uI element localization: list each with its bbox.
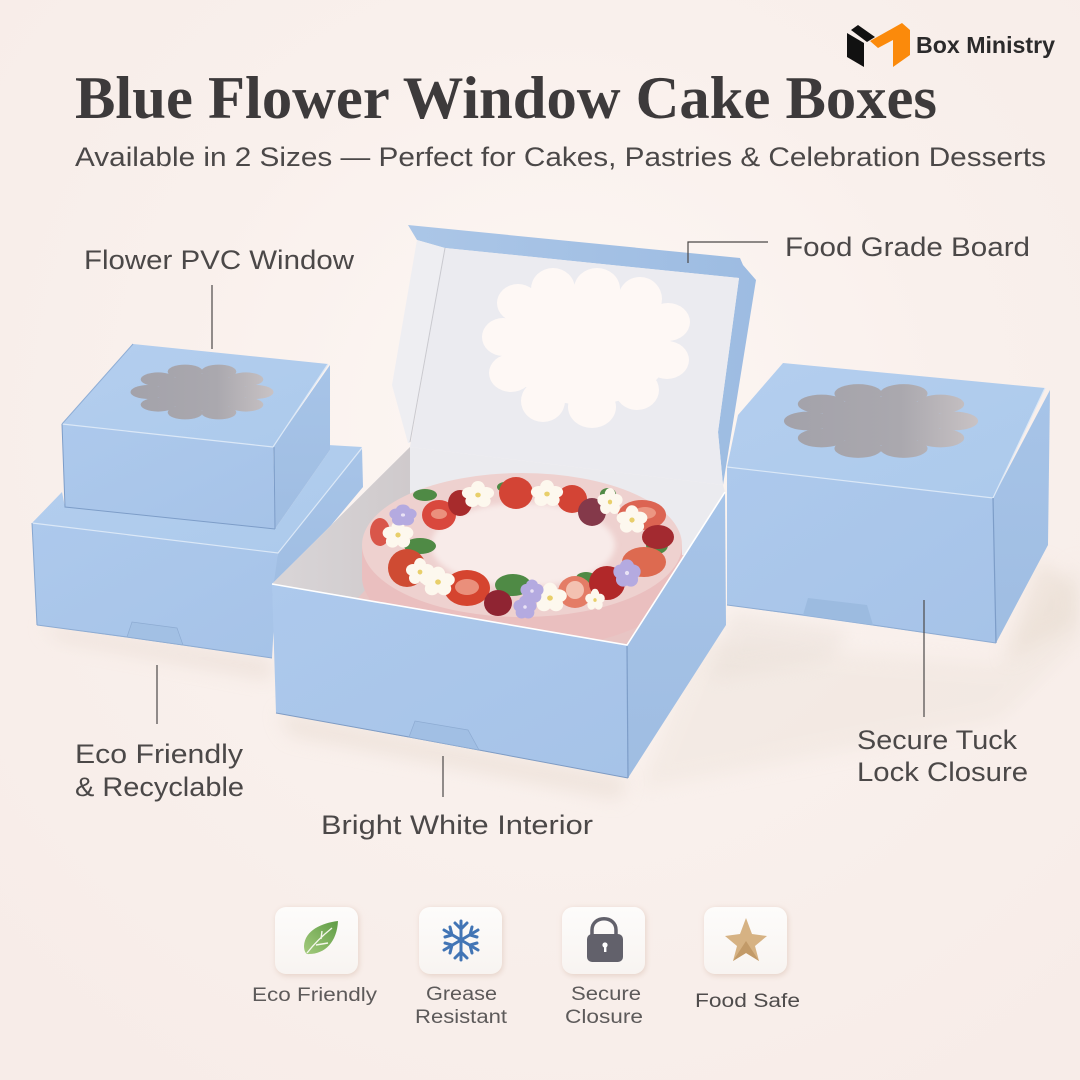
callout: Flower PVC Window: Flower PVC Window <box>84 245 355 275</box>
floor shadows <box>40 560 1080 800</box>
icon: snowflake <box>444 921 478 960</box>
feature: Secure Closure: Closure <box>565 1007 643 1028</box>
subtitle: Available in 2 Sizes — Perfect for Cakes, Pastries & Celebration Desserts <box>75 142 1046 172</box>
callout: Secure Tuck Lock Closure <box>857 600 1028 787</box>
callout: Eco Friendly & Recyclable <box>75 665 244 802</box>
callout: Secure Tuck Lock Closure: Lock Closure <box>857 757 1028 787</box>
callout: Food Grade Board <box>688 232 1030 263</box>
box interior <box>272 447 725 645</box>
box: large stacked box, left <box>32 445 363 658</box>
feature: Eco Friendly <box>252 907 378 1006</box>
callout: Secure Tuck Lock Closure: Secure Tuck <box>857 725 1018 755</box>
open lid <box>392 225 756 485</box>
feature: Food Safe <box>695 907 800 1012</box>
callout: Bright White Interior: Bright White Interior <box>321 810 593 840</box>
feature: Grease Resistant <box>415 907 508 1028</box>
title: Blue Flower Window Cake Boxes <box>75 65 937 131</box>
feature: Grease Resistant: Resistant <box>415 1007 508 1028</box>
feature: Eco Friendly: Eco Friendly <box>252 985 378 1006</box>
feature: Food Safe: Food Safe <box>695 991 800 1012</box>
logo: Box Ministry: Box Ministry <box>916 32 1055 58</box>
feature: Secure Closure: Secure <box>571 984 641 1005</box>
icon: padlock <box>587 919 623 962</box>
flower window: small box <box>130 365 274 419</box>
callout: Eco Friendly & Recyclable: Eco Friendly <box>75 739 244 769</box>
callout: Food Grade Board: Food Grade Board <box>785 232 1030 262</box>
flower window: medium box <box>784 384 978 458</box>
icon: leaf <box>304 921 338 954</box>
logo: Box Ministry <box>847 23 1055 67</box>
icon: star <box>725 918 767 961</box>
callout: Eco Friendly & Recyclable: & Recyclable <box>75 772 244 802</box>
front and side panels <box>272 584 628 778</box>
box: medium box, right <box>727 363 1050 643</box>
cake <box>362 473 682 649</box>
flower window: lid <box>482 268 690 428</box>
box: main open box with cake <box>272 225 756 778</box>
box: small stacked box with flower window <box>62 344 330 529</box>
feature: Secure Closure <box>562 907 646 1028</box>
feature: Grease Resistant: Grease <box>426 984 497 1005</box>
strawberry and flower wreath <box>370 477 674 619</box>
